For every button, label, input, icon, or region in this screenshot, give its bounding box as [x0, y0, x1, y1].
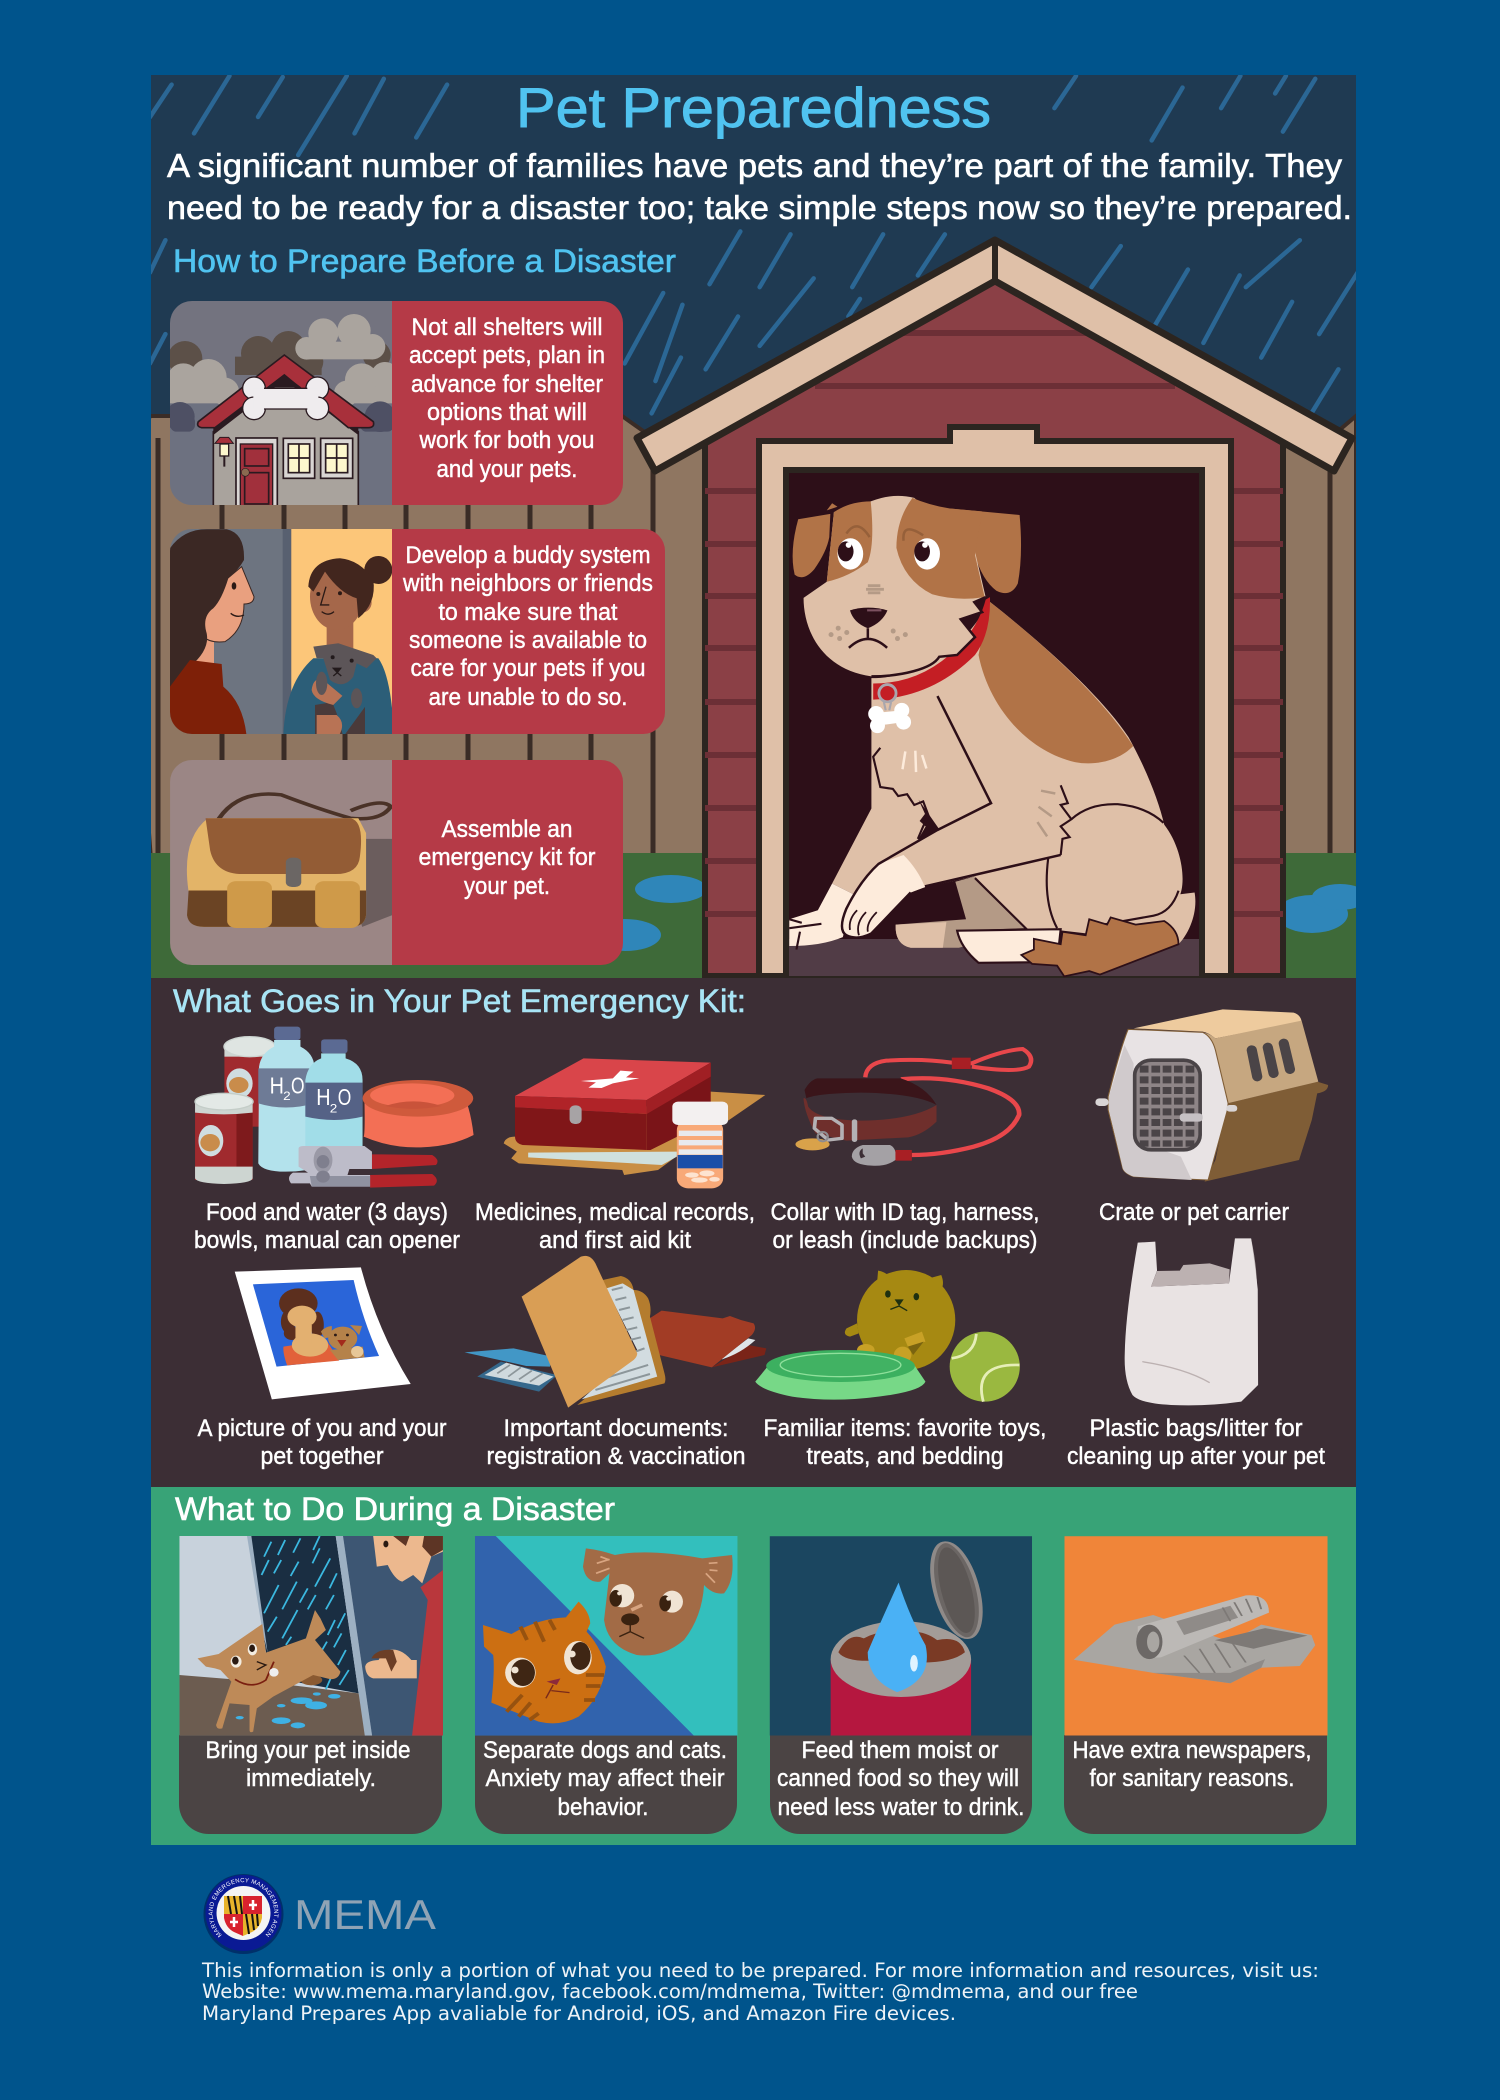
during background: [151, 1487, 1356, 1845]
during captions: behavior.: [558, 1794, 648, 1821]
card text: [409, 314, 605, 483]
illustration: newspapers: [1064, 1536, 1328, 1736]
illustration: neighbors: [170, 528, 395, 737]
doghouse: [637, 240, 1352, 976]
card text: emergency kit for: [418, 844, 596, 871]
far hind leg: [896, 876, 1027, 948]
collar: [873, 597, 990, 700]
during captions: immediately.: [246, 1765, 376, 1792]
house walls: [705, 281, 1283, 976]
card text: advance for shelter: [411, 371, 603, 398]
kit captions: bowls, manual can opener: [194, 1227, 460, 1254]
illustration: bring pet inside: [179, 1536, 443, 1736]
body: [832, 601, 1195, 944]
chest fur: [873, 748, 929, 839]
saddle patch: [979, 601, 1133, 763]
card text: with neighbors or friends: [402, 570, 653, 597]
icon: food, water, bowl, opener: O: [291, 1073, 305, 1099]
card panel: [392, 760, 623, 965]
kit captions: Crate or pet carrier: [1099, 1199, 1289, 1226]
night sky: [151, 75, 1356, 430]
card text: Assemble an: [442, 816, 572, 843]
grass: [151, 853, 1358, 978]
far paw: [789, 884, 854, 946]
tag: [879, 685, 896, 702]
intro text: A significant number of families have pets and they’re part of the family. They: [167, 147, 1343, 184]
card text: your pet.: [464, 873, 550, 900]
card text: someone is available to: [409, 627, 647, 654]
heading: how to prepare: How to Prepare Before a Disaster: [173, 243, 676, 279]
icon: plastic bag: [1125, 1238, 1258, 1405]
panel: emergency kit: [151, 978, 1356, 1487]
card text: options that will: [427, 399, 587, 426]
ears: [793, 514, 830, 577]
icon: documents: [465, 1256, 766, 1408]
head: [804, 496, 986, 676]
card text: [418, 816, 596, 900]
kit captions: treats, and bedding: [806, 1443, 1004, 1470]
during captions: Bring your pet inside: [206, 1737, 410, 1764]
rain streaks: [150, 76, 1358, 413]
door trim: [759, 427, 1231, 976]
hind foot: [957, 929, 1061, 963]
kit captions: registration & vaccination: [486, 1443, 746, 1470]
during captions: need less water to drink.: [778, 1794, 1024, 1821]
door opening: [786, 470, 1202, 975]
card panel: [392, 529, 665, 734]
kit captions: Collar with ID tag, harness,: [770, 1199, 1040, 1226]
card text: to make sure that: [438, 599, 618, 626]
kit captions: Food and water (3 days): [206, 1199, 448, 1226]
during captions: [206, 1737, 1312, 1821]
during captions: Anxiety may affect their: [486, 1765, 725, 1792]
roof: [637, 240, 1352, 471]
logo: MEMA seal: [204, 1874, 284, 1954]
card panel: [392, 301, 623, 505]
floor: [789, 939, 1199, 976]
illustration: bag: [170, 760, 392, 965]
card: buddy system: [170, 528, 665, 737]
footer text: [201, 1959, 1319, 2025]
icon: food, water, bowl, opener: H: [316, 1084, 331, 1111]
heading: during: What to Do During a Disaster: [175, 1491, 615, 1527]
icon: first aid kit and medicine: [504, 1058, 765, 1188]
panel: during a disaster: [151, 1487, 1356, 1845]
during captions: Feed them moist or: [802, 1737, 998, 1764]
kit captions: Important documents:: [504, 1415, 728, 1442]
card text: work for both you: [419, 427, 594, 454]
kit captions: Familiar items: favorite toys,: [764, 1415, 1046, 1442]
footer text: Maryland Prepares App avaliable for Android, iOS, and Amazon Fire devices.: [202, 2002, 956, 2025]
footer text: Website: www.mema.maryland.gov, facebook.com/mdmema, Twitter: @mdmema, and our free: [202, 1980, 1138, 2003]
card text: accept pets, plan in: [409, 342, 605, 369]
near front paw: [842, 855, 925, 937]
card text: care for your pets if you: [410, 655, 646, 682]
tail: [1021, 917, 1179, 976]
haunch line: [1047, 785, 1164, 928]
during captions: Have extra newspapers,: [1072, 1737, 1312, 1764]
during captions: canned food so they will: [777, 1765, 1019, 1792]
muzzle: [850, 608, 887, 628]
illustration: house and bone: [165, 300, 399, 507]
icon: food, water, bowl, opener: O: [338, 1084, 351, 1111]
puddles: [589, 875, 1368, 951]
dog: [789, 496, 1195, 976]
card text: Not all shelters will: [412, 314, 602, 341]
illustration: dog and cat: [475, 1536, 737, 1736]
kit captions: and first aid kit: [539, 1227, 691, 1254]
kit captions: Medicines, medical records,: [475, 1199, 755, 1226]
intro text: [167, 147, 1352, 226]
caption boxes: [179, 1735, 1327, 1834]
card: emergency kit: [170, 760, 623, 965]
footer text: This information is only a portion of what you need to be prepared. For more information and resources, visit us:: [201, 1959, 1319, 1982]
card text: are unable to do so.: [428, 684, 628, 711]
card text: Develop a buddy system: [406, 542, 650, 569]
icon: food, water, bowl, opener: 2: [283, 1089, 291, 1103]
illustration: moist food: [770, 1536, 1032, 1736]
card: shelters: [165, 300, 623, 507]
icon: food, water, bowl, opener: H: [270, 1073, 284, 1099]
fence: [120, 416, 1356, 860]
heading: kit: What Goes in Your Pet Emergency Kit:: [173, 983, 746, 1019]
eyes: [837, 538, 863, 570]
kit captions: Plastic bags/litter for: [1090, 1415, 1302, 1442]
kit captions: pet together: [260, 1443, 384, 1470]
icon: crate: [1095, 1009, 1328, 1182]
during captions: Separate dogs and cats.: [483, 1737, 727, 1764]
logo: MEMA seal: MARYLAND EMERGENCY MANAGEMENT AGENCY: [208, 1878, 278, 1938]
kit captions: A picture of you and your: [198, 1415, 447, 1442]
kit captions: or leash (include backups): [772, 1227, 1038, 1254]
intro text: need to be ready for a disaster too; take simple steps now so they’re prepared.: [167, 189, 1352, 226]
card text: and your pets.: [436, 456, 578, 483]
kit captions: cleaning up after your pet: [1067, 1443, 1325, 1470]
icon: food, water, bowl, opener: [195, 1027, 474, 1188]
chest gap: [918, 800, 939, 840]
card text: [402, 542, 653, 711]
panel: preparation scene: [120, 75, 1368, 978]
kit captions: [194, 1199, 1325, 1470]
logo text: MEMA: [294, 1891, 436, 1938]
icon: toys and bowl: [755, 1270, 1020, 1402]
icon: food, water, bowl, opener: 2: [330, 1101, 337, 1115]
kit background: [151, 978, 1356, 1487]
icon: collar and leash: [795, 1049, 1031, 1166]
icon: photo: [235, 1267, 411, 1399]
title: Pet Preparedness: [516, 76, 991, 139]
during captions: for sanitary reasons.: [1090, 1765, 1294, 1792]
